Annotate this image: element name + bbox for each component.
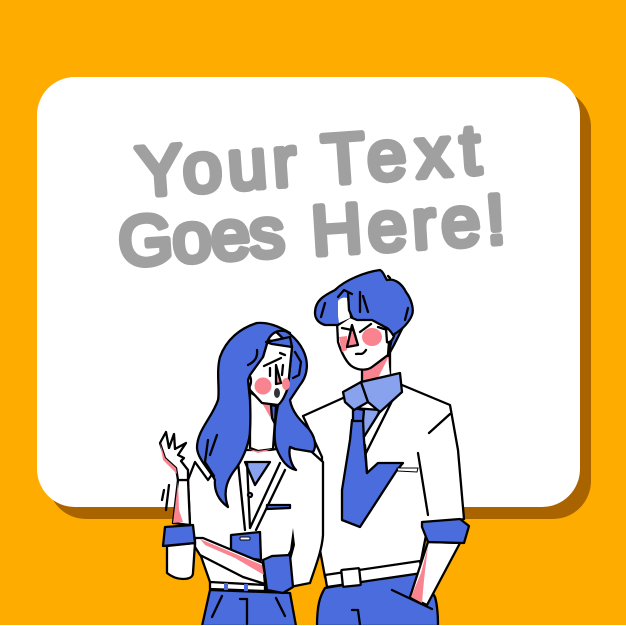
man hair back bbox=[388, 325, 403, 356]
heading: Here! bbox=[309, 180, 508, 270]
man face bbox=[337, 310, 389, 370]
woman belt loops bbox=[224, 583, 248, 591]
man light shirt front bbox=[353, 408, 380, 442]
woman badge clip bbox=[240, 537, 250, 540]
man collar bbox=[343, 382, 368, 410]
woman left cuff bbox=[163, 525, 195, 546]
character: man bbox=[303, 270, 469, 626]
man tie knot bbox=[353, 408, 364, 421]
motion lines bbox=[162, 485, 169, 510]
woman lanyard bbox=[238, 462, 285, 530]
woman blouse shadow bbox=[286, 528, 295, 560]
character: woman bbox=[160, 323, 323, 626]
woman arm bbox=[195, 538, 265, 584]
heading: Goes bbox=[116, 193, 287, 281]
woman raised upper arm bbox=[173, 480, 190, 525]
woman cheeks bbox=[254, 378, 272, 394]
man ear bbox=[386, 327, 395, 342]
man hair strands bbox=[321, 290, 408, 320]
man features bbox=[342, 324, 384, 354]
man belt loop bbox=[341, 568, 361, 587]
heading bbox=[116, 110, 508, 281]
woman neck shade bbox=[248, 403, 274, 453]
woman neck bbox=[250, 392, 276, 451]
man trousers bbox=[317, 572, 438, 626]
woman hair left bbox=[197, 323, 290, 507]
woman trouser folds bbox=[212, 596, 285, 624]
woman hand shade bbox=[160, 443, 177, 474]
woman id badge bbox=[231, 532, 261, 560]
speech panel bbox=[37, 77, 580, 507]
woman belt bbox=[210, 582, 265, 591]
woman sleeve cuff bbox=[263, 555, 293, 593]
man nose bbox=[347, 325, 358, 347]
man hair bbox=[315, 270, 413, 335]
woman shirt pocket bbox=[267, 505, 290, 509]
woman nose bbox=[276, 365, 281, 384]
woman arm shadow bbox=[200, 539, 264, 575]
man pocket line bbox=[352, 590, 432, 625]
man shirt pocket bbox=[397, 468, 418, 472]
woman hair dark fringe bbox=[266, 337, 292, 347]
woman button bbox=[248, 493, 252, 497]
man sleeve cuff bbox=[422, 519, 469, 543]
woman inner top bbox=[245, 462, 270, 485]
man hair tuft bbox=[388, 276, 390, 278]
woman arm shade bbox=[173, 482, 183, 523]
heading: Your bbox=[134, 122, 299, 211]
woman ear bbox=[235, 371, 251, 391]
man forearm shadow bbox=[411, 546, 428, 603]
man belt bbox=[325, 561, 422, 587]
woman face bbox=[247, 340, 292, 405]
man cheeks bbox=[362, 328, 382, 346]
woman lower sleeve bbox=[167, 543, 195, 579]
woman trousers bbox=[202, 590, 296, 626]
woman features bbox=[264, 353, 285, 376]
bottom edge line bbox=[0, 625, 626, 626]
man shirt bbox=[303, 385, 464, 577]
woman hair under chin bbox=[271, 405, 276, 424]
man white placket bbox=[362, 395, 395, 455]
woman hand bbox=[160, 432, 188, 480]
woman hair right bbox=[270, 326, 315, 470]
woman blouse bbox=[188, 445, 323, 592]
speech panel shadow bbox=[48, 89, 591, 519]
heading: Text bbox=[320, 110, 483, 199]
woman hair strands bbox=[205, 350, 301, 476]
man tie bbox=[342, 420, 403, 527]
woman mouth bbox=[274, 388, 280, 398]
man hair parting bbox=[338, 298, 350, 323]
man neck bbox=[362, 350, 390, 402]
man shirt folds bbox=[365, 414, 450, 515]
man forearm bbox=[410, 542, 460, 605]
